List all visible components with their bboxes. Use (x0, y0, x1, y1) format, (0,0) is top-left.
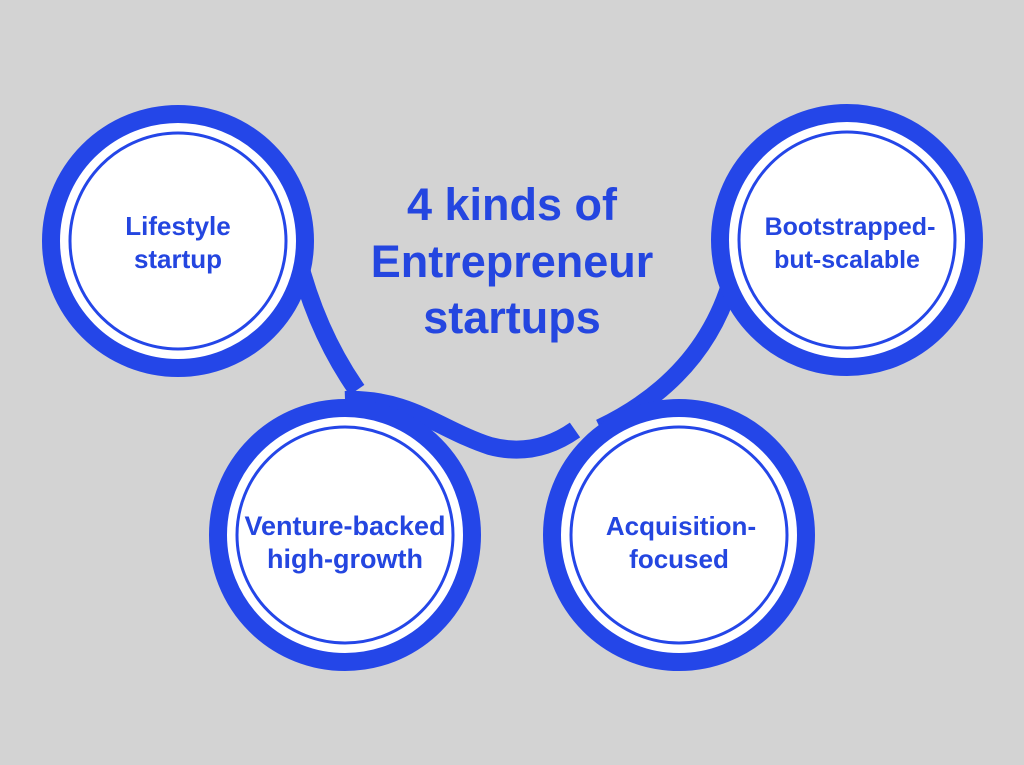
connector: right arc (600, 285, 730, 428)
circle: Bootstrapped-but-scalable (720, 113, 974, 367)
title: 4 kinds of (407, 179, 618, 230)
circle: Acquisition-focused (552, 408, 806, 662)
circle: Lifestyle startup (51, 114, 305, 368)
circle: Bootstrapped-but-scalable: Bootstrapped- (765, 213, 935, 241)
circle: Acquisition-focused: Acquisition- (606, 511, 756, 541)
title: startups (423, 292, 601, 343)
circle: Acquisition-focused: focused (629, 544, 729, 574)
title: Entrepreneur (371, 236, 653, 287)
connector: bottom arc (345, 400, 575, 450)
circle: Venture-backed high-growth: Venture-backed (244, 511, 446, 541)
connector: left arc (296, 250, 357, 390)
title (371, 179, 653, 343)
circle: Lifestyle startup: startup (134, 244, 222, 274)
circle: Lifestyle startup: Lifestyle (125, 211, 231, 241)
circle: Venture-backed high-growth: high-growth (267, 544, 423, 574)
circle: Venture-backed high-growth (218, 408, 472, 662)
circle: Bootstrapped-but-scalable: but-scalable (774, 246, 920, 274)
